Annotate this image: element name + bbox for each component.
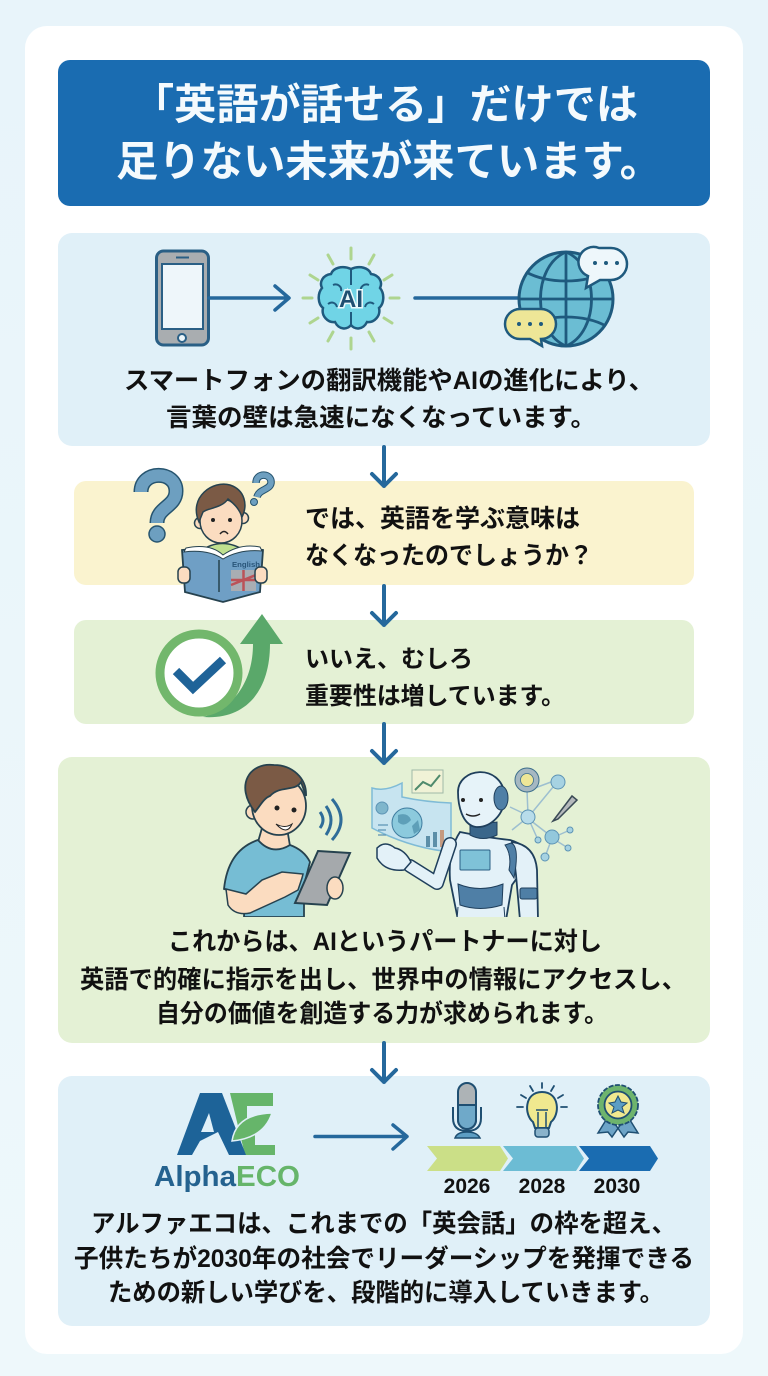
icon: light bulb — [517, 1083, 567, 1137]
icon: boy reading book: English — [232, 560, 260, 569]
text: AlphaECO: アルファエコは、これまでの「英会話」の枠を超え、 — [91, 1210, 676, 1238]
text: AlphaECO — [74, 1210, 694, 1307]
icon: AI brain: AI — [339, 286, 363, 313]
icon: globe with speech bubbles — [505, 247, 627, 346]
title banner: 足りない未来が来ています。 — [116, 138, 662, 185]
timeline: chevrons — [427, 1146, 658, 1171]
icon: smartphone — [156, 251, 208, 345]
text: question — [305, 505, 593, 570]
text: question: では、英語を学ぶ意味は — [305, 505, 580, 533]
icon: boy reading book — [178, 484, 267, 602]
arrow: down 4 — [372, 1043, 396, 1082]
text: translation: 言葉の壁は急速になくなっています。 — [166, 404, 596, 432]
icon: holographic display — [372, 770, 451, 852]
panel: translation technology — [58, 233, 710, 446]
text: translation — [124, 367, 654, 432]
text: question: なくなったのでしょうか？ — [305, 542, 593, 570]
panel: AlphaECO — [58, 1076, 710, 1326]
text: AI partner: 自分の価値を創造する力が求められます。 — [156, 999, 608, 1028]
arrow: down 1 — [372, 447, 396, 486]
icon: award medal — [598, 1085, 638, 1137]
logo: AlphaECO: AlphaECO — [154, 1161, 300, 1193]
arrow: logo to timeline — [315, 1125, 407, 1149]
arrow: phone to AI — [209, 286, 289, 310]
arrow: down 2 — [372, 586, 396, 625]
icon: question marks — [141, 475, 271, 542]
text: AI partner — [80, 928, 686, 1028]
icon: boy with tablet — [224, 765, 350, 917]
text: AI partner: 英語で的確に指示を出し、世界中の情報にアクセスし、 — [80, 966, 686, 994]
text: answer — [305, 646, 565, 710]
panel: AI partner — [58, 757, 710, 1043]
text: answer: いいえ、むしろ — [305, 646, 473, 673]
connector line: AI to globe — [415, 296, 520, 300]
panel: answer — [74, 614, 694, 724]
icon: AI brain — [303, 248, 399, 349]
title banner — [58, 60, 710, 206]
logo: AlphaECO — [154, 1093, 300, 1193]
text: AI partner: これからは、AIというパートナーに対し — [168, 928, 602, 956]
icon: check with rising arrow — [160, 614, 283, 717]
icon: idea network — [510, 768, 577, 861]
text: translation: スマートフォンの翻訳機能やAIの進化により、 — [124, 367, 654, 395]
arrow: down 3 — [372, 724, 396, 763]
title banner: 「英語が話せる」だけでは — [132, 81, 638, 128]
panel: question — [74, 475, 694, 602]
timeline: years: 2028 — [519, 1175, 566, 1198]
icon: microphone — [453, 1083, 481, 1138]
icon: wifi signal — [320, 799, 341, 840]
timeline: years — [444, 1175, 640, 1198]
text: AlphaECO: 子供たちが2030年の社会でリーダーシップを発揮できる — [74, 1244, 694, 1273]
text: AlphaECO: ための新しい学びを、段階的に導入していきます。 — [108, 1279, 664, 1307]
timeline: years: 2030 — [594, 1175, 640, 1198]
timeline: years: 2026 — [444, 1175, 490, 1198]
icon: robot — [377, 772, 538, 920]
text: answer: 重要性は増しています。 — [305, 683, 565, 710]
